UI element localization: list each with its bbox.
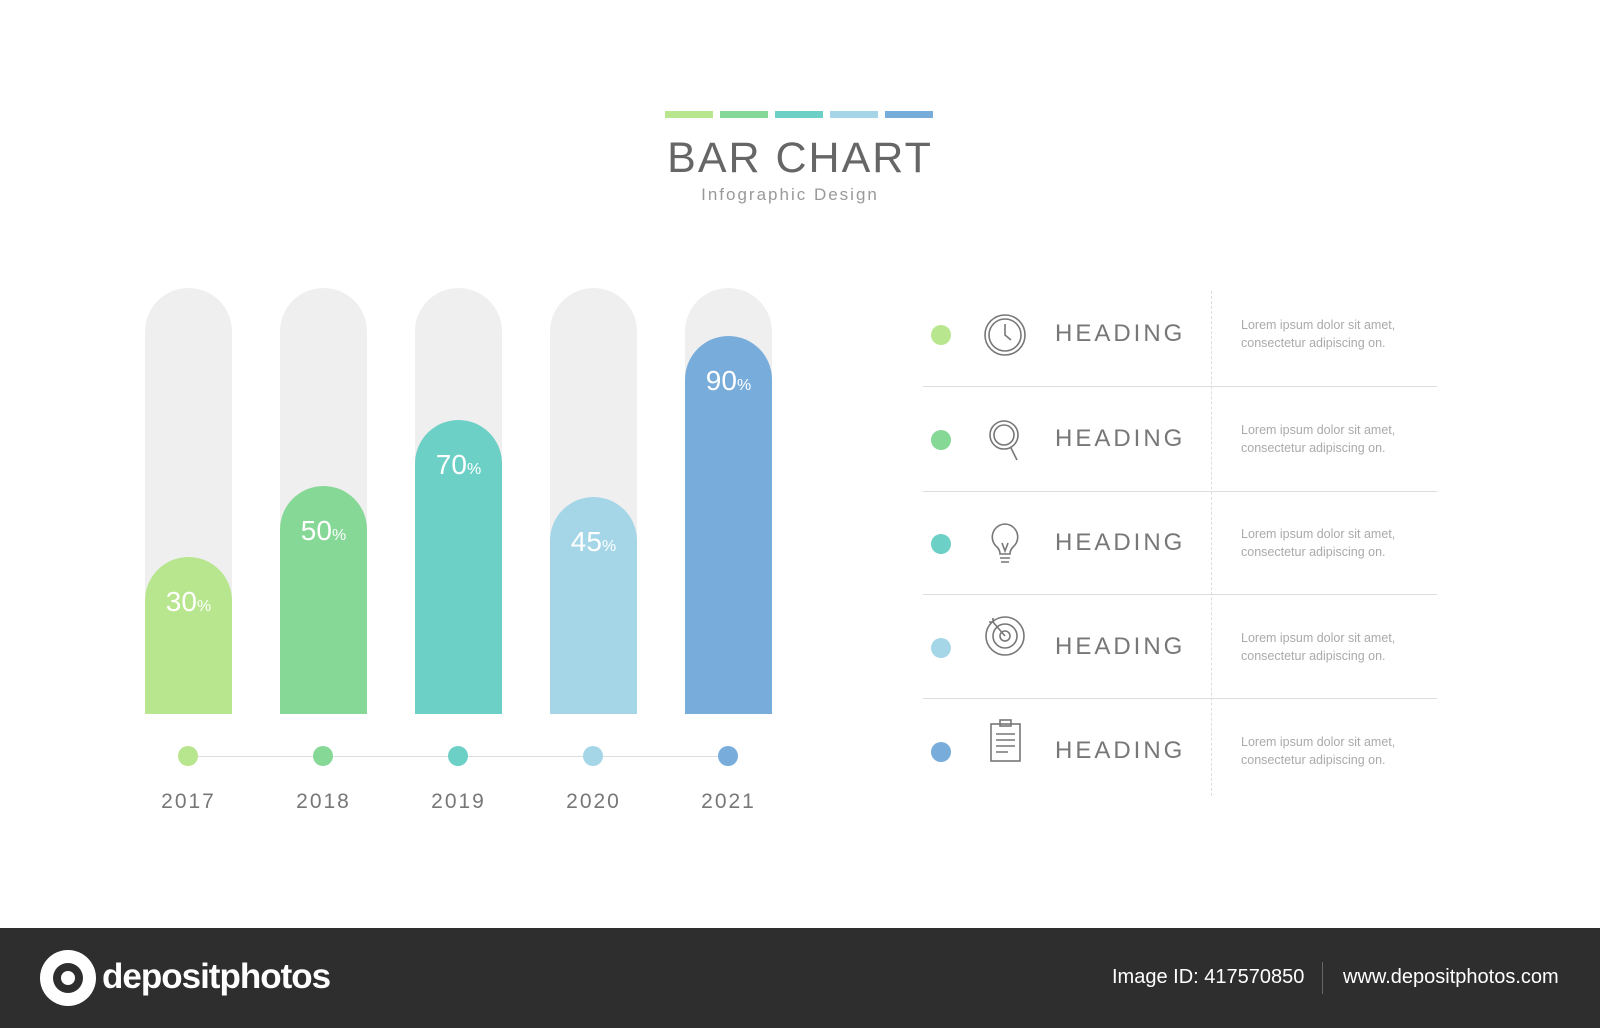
headings: HEADING xyxy=(1055,320,1185,347)
descriptions: consectetur adipiscing on. xyxy=(1241,753,1386,767)
footer image id: Image ID: 417570850 xyxy=(1112,966,1304,988)
headings: HEADING xyxy=(1055,425,1185,452)
bar chart: 50% xyxy=(301,515,346,546)
icon: target xyxy=(986,617,1024,655)
descriptions: consectetur adipiscing on. xyxy=(1241,545,1386,559)
icon: bulb xyxy=(992,524,1018,562)
descriptions: consectetur adipiscing on. xyxy=(1241,336,1386,350)
descriptions: consectetur adipiscing on. xyxy=(1241,441,1386,455)
icon: clipboard xyxy=(991,720,1020,761)
year labels: 2019 xyxy=(431,790,486,813)
timeline xyxy=(178,746,738,766)
bar chart: 30% xyxy=(166,586,211,617)
icons xyxy=(984,314,1026,762)
footer logo: depositphotos xyxy=(102,957,330,996)
descriptions: Lorem ipsum dolor sit amet, xyxy=(1241,423,1395,437)
descriptions: Lorem ipsum dolor sit amet, xyxy=(1241,631,1395,645)
year labels: 2021 xyxy=(701,790,756,813)
year labels: 2020 xyxy=(566,790,621,813)
title: BAR CHART xyxy=(667,134,933,182)
title color bars xyxy=(665,111,933,118)
bar chart: 90% xyxy=(706,365,751,396)
descriptions: Lorem ipsum dolor sit amet, xyxy=(1241,527,1395,541)
icon: magnifier xyxy=(990,421,1018,460)
footer logo xyxy=(40,950,330,1006)
descriptions: Lorem ipsum dolor sit amet, xyxy=(1241,318,1395,332)
subtitle: Infographic Design xyxy=(701,185,879,204)
headings: HEADING xyxy=(1055,633,1185,660)
icon: clock xyxy=(985,315,1025,355)
headings: HEADING xyxy=(1055,529,1185,556)
footer url: www.depositphotos.com xyxy=(1343,966,1559,988)
bar chart xyxy=(145,288,772,714)
descriptions: consectetur adipiscing on. xyxy=(1241,649,1386,663)
headings xyxy=(1055,320,1185,764)
descriptions xyxy=(1241,318,1395,767)
year labels: 2018 xyxy=(296,790,351,813)
bar chart: 45% xyxy=(571,526,616,557)
footer xyxy=(0,928,1600,1028)
bar chart: 70% xyxy=(436,449,481,480)
list panel xyxy=(1211,291,1212,796)
headings: HEADING xyxy=(1055,737,1185,764)
descriptions: Lorem ipsum dolor sit amet, xyxy=(1241,735,1395,749)
year labels xyxy=(161,790,756,813)
year labels: 2017 xyxy=(161,790,216,813)
row dots xyxy=(931,325,951,762)
